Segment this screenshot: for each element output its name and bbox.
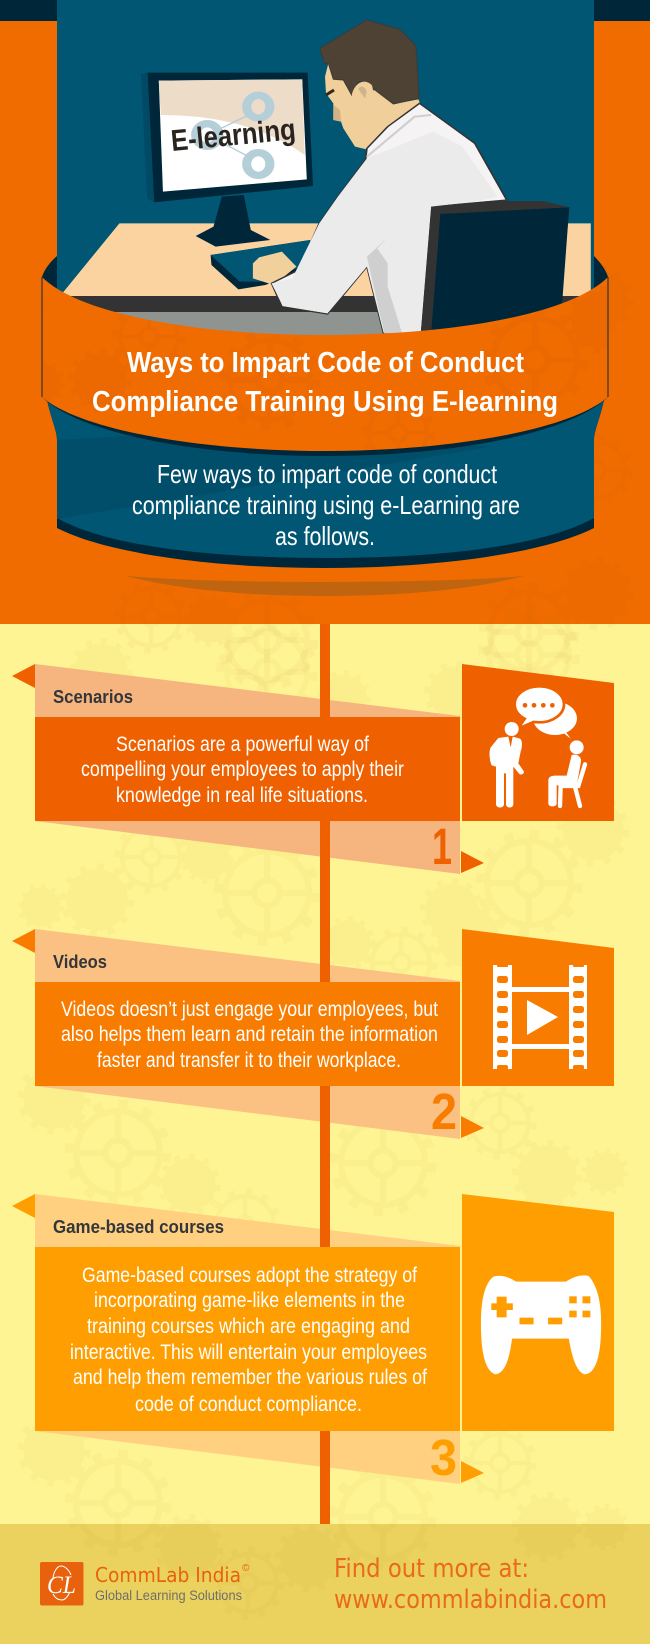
body text: faster and transfer it to their workplace. [97,1049,401,1072]
section 2: light ribbon [35,929,460,1139]
intro text [132,459,520,551]
footer call to action [334,1554,607,1615]
ground shadow [126,576,524,596]
background: yellow body [0,624,650,1524]
body text: also helps them learn and retain the information [61,1023,438,1046]
body text [81,733,404,807]
icon: film strip [493,964,587,1070]
number 3: 3 [430,1429,457,1486]
gears: orange header pattern [118,269,631,686]
man: head [320,20,422,149]
body text: incorporating game-like elements in the [94,1289,405,1312]
footer call to action: Find out more at: [334,1554,529,1584]
icon panel [462,929,614,1086]
tagline: Global Learning Solutions [95,1588,242,1603]
number 2: 2 [431,1083,457,1140]
illustration panel: blue backdrop [57,0,594,340]
body text: Game-based courses adopt the strategy of [82,1264,417,1287]
body text: Videos doesn’t just engage your employees, but [61,998,438,1021]
man: white shirt [272,103,507,333]
monitor caption: E-learning: E-learning [170,113,297,158]
section 1: light ribbon [35,664,460,874]
left arrow tip [12,929,35,953]
band: shadow [42,397,608,456]
icon panel [462,1194,614,1431]
icon: two people talking [489,686,585,807]
section 3: game-based courses [12,1194,614,1486]
heading: Videos [53,952,107,972]
right arrow tip [461,1461,484,1483]
gears on the ribbon [20,289,631,466]
band: orange ribbon [42,277,608,451]
body text [61,998,438,1072]
left arrow tip [12,1194,35,1218]
body text: Scenarios are a powerful way of [116,733,369,756]
body text: knowledge in real life situations. [116,784,368,807]
section 3: light ribbon [35,1194,460,1484]
icon: game controller [481,1275,601,1374]
background: footer band [0,1524,650,1644]
band: side edges [42,277,608,397]
section 1: scenarios [12,664,614,875]
right arrow tip [461,851,484,873]
copyright mark: © [242,1563,250,1574]
section 2: videos [12,929,614,1140]
text panel [35,982,460,1086]
title [92,347,558,418]
footer call to action: www.commlabindia.com [334,1585,607,1615]
heading: Game-based courses [53,1217,224,1237]
band: back rim [42,256,608,300]
desk [41,223,591,342]
logo mark [40,1562,84,1606]
title: Compliance Training Using E-learning [92,386,558,418]
body text [70,1264,427,1416]
title: Ways to Impart Code of Conduct [127,347,524,379]
intro text: as follows. [275,521,375,551]
subtitle panel: blue body [46,395,605,568]
illustration: desk and computer [41,73,591,342]
text panel [35,1247,460,1431]
intro text: Few ways to impart code of conduct [157,459,498,489]
body text: and help them remember the various rules of [73,1366,427,1389]
heading: Scenarios [53,687,133,707]
left arrow tip [12,664,35,688]
body text: training courses which are engaging and [87,1315,410,1338]
timeline line [320,624,330,1524]
number 1: 1 [432,818,452,875]
intro text: compliance training using e-Learning are [132,490,520,520]
icon panel [462,664,614,821]
footer logo [40,1562,250,1606]
logo mark: CL [47,1572,76,1599]
chair [421,201,569,333]
body text: code of conduct compliance. [135,1393,362,1416]
body text: interactive. This will entertain your employees [70,1341,427,1364]
background: orange header [0,0,650,624]
body text: compelling your employees to apply their [81,758,404,781]
right arrow tip [461,1116,484,1138]
monitor [141,73,313,247]
top dark strip [0,0,650,21]
gears: yellow body and footer pattern [20,609,626,1616]
brand name: CommLab India [95,1563,241,1587]
keyboard [211,240,310,289]
text panel [35,717,460,821]
